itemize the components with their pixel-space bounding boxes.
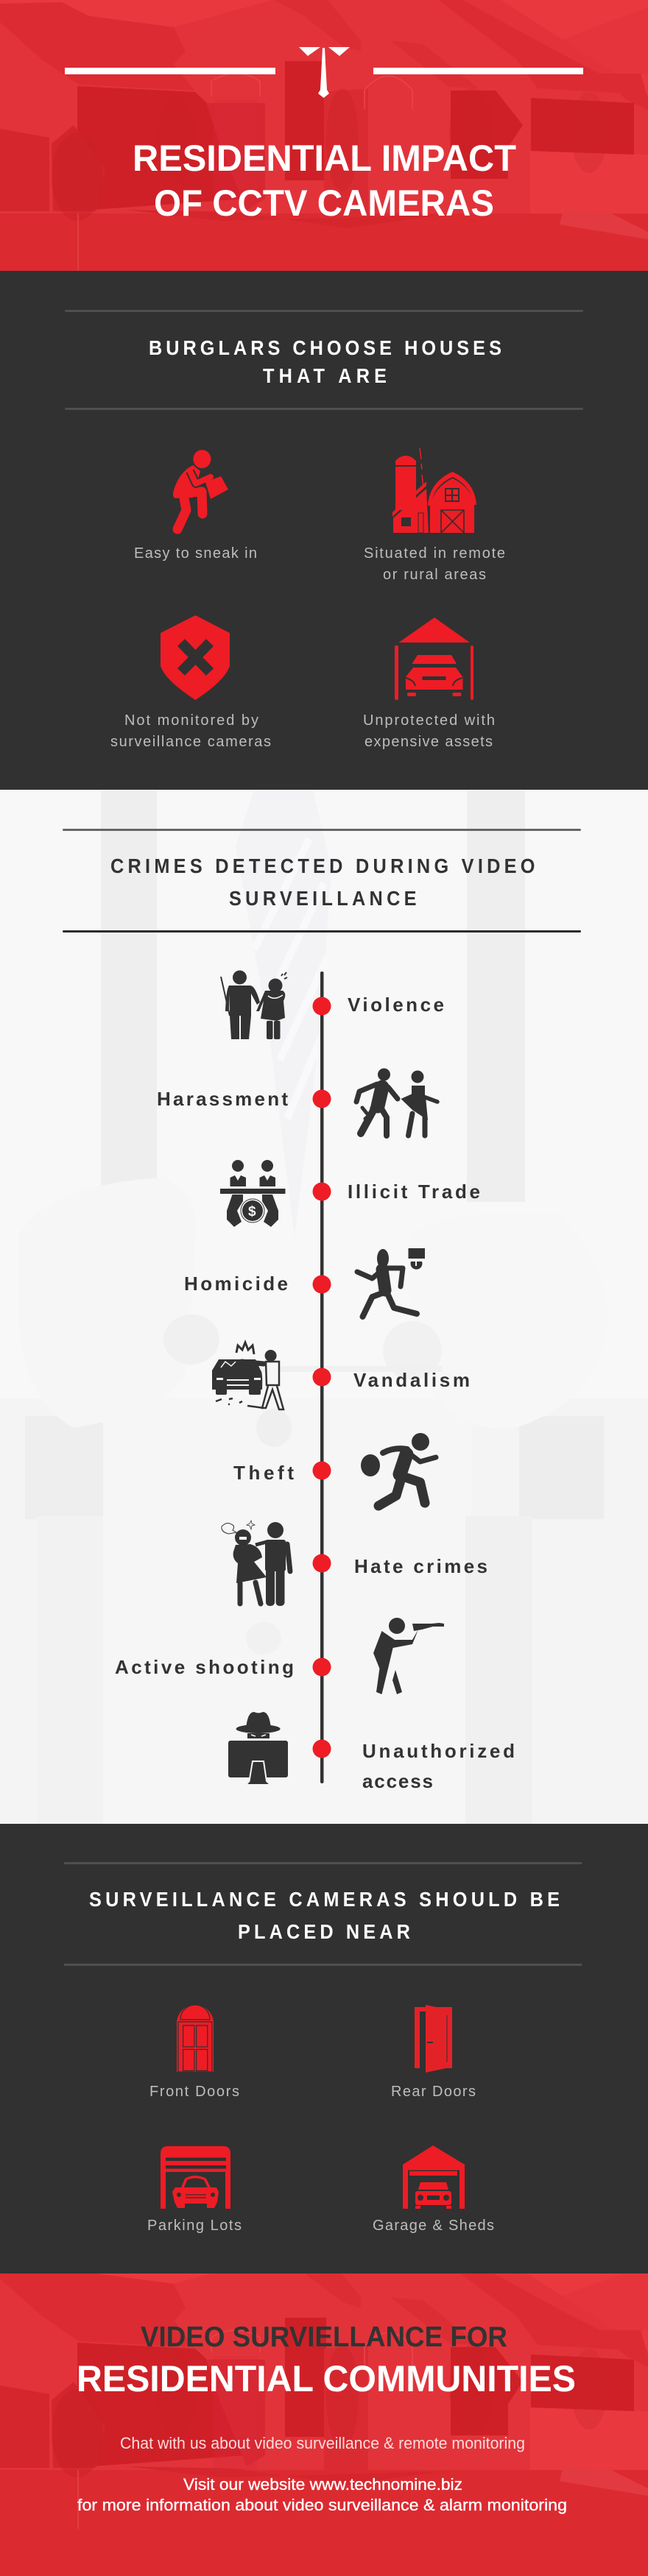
icon: theft xyxy=(361,1433,436,1506)
heading rules xyxy=(63,829,581,933)
icon: hate crime xyxy=(222,1521,290,1606)
label: not monitored: surveillance cameras xyxy=(110,734,271,750)
icon: illicit trade: $ xyxy=(248,1204,256,1220)
heading: burglars choose houses: THAT ARE xyxy=(263,364,387,387)
label: unauthorized access xyxy=(362,1740,515,1792)
icon: vandalism xyxy=(212,1342,284,1409)
icon: front door xyxy=(177,2005,214,2072)
label: front doors: Front Doors xyxy=(149,2084,239,2100)
footer title xyxy=(77,2321,576,2399)
label: not monitored: Not monitored by xyxy=(124,712,258,729)
chat text: Chat with us about video surveillance & remote monitoring xyxy=(120,2434,525,2452)
heading: crimes detected: CRIMES DETECTED DURING VIDEO xyxy=(110,854,535,877)
heading: placed near: PLACED NEAR xyxy=(238,1920,410,1943)
right header bar xyxy=(373,68,583,74)
heading: crimes detected xyxy=(110,854,535,910)
label: unprotected: expensive assets xyxy=(364,734,493,750)
icon: illicit trade xyxy=(220,1160,286,1227)
left header bar xyxy=(65,68,275,74)
title: OF CCTV CAMERAS xyxy=(154,183,494,224)
panel: surveillance cameras should be placed near xyxy=(0,1824,648,2274)
website text: Visit our website www.technomine.biz xyxy=(183,2475,462,2494)
icon: violence xyxy=(221,970,287,1039)
panel: burglars choose houses xyxy=(0,271,648,790)
heading: placed near xyxy=(89,1888,560,1943)
label: theft: Theft xyxy=(233,1462,294,1484)
label: garage and sheds: Garage & Sheds xyxy=(373,2218,494,2234)
label: unprotected xyxy=(363,712,495,750)
timeline markers xyxy=(312,997,331,1758)
icon: hacker at monitor xyxy=(228,1712,288,1785)
title xyxy=(133,138,516,224)
label: vandalism: Vandalism xyxy=(353,1369,470,1391)
icon: active shooter xyxy=(373,1618,444,1694)
title: RESIDENTIAL IMPACT xyxy=(133,138,516,179)
label: remote or rural areas xyxy=(364,545,505,583)
label: harassment: Harassment xyxy=(157,1088,288,1110)
label: parking lots: Parking Lots xyxy=(147,2218,242,2234)
label: unauthorized access: Unauthorized xyxy=(362,1740,515,1762)
label: unauthorized access: access xyxy=(362,1770,433,1792)
background: red tinted house photo xyxy=(0,2274,648,2576)
heading: crimes detected: SURVEILLANCE xyxy=(229,887,417,910)
icon: carport with car xyxy=(395,618,473,700)
icon: parking structure with car xyxy=(161,2146,230,2209)
icon: homicide xyxy=(357,1248,425,1317)
panel: header banner xyxy=(0,0,648,339)
panel: crimes detected during video surveillance xyxy=(0,790,648,1824)
footer title: RESIDENTIAL COMMUNITIES xyxy=(77,2358,576,2399)
icon: remote barn with silo xyxy=(392,448,476,533)
icon: rear door xyxy=(415,2005,452,2073)
icon: white collar and tie xyxy=(299,47,350,98)
heading: burglars choose houses: BURGLARS CHOOSE HOUSES xyxy=(149,336,501,359)
heading: burglars choose houses xyxy=(149,336,501,387)
background: faded suit and handcuffs photo xyxy=(0,790,648,1824)
label: not monitored xyxy=(110,712,271,750)
label: easy to sneak in: Easy to sneak in xyxy=(134,545,257,562)
timeline axis xyxy=(320,972,324,1783)
label: homicide: Homicide xyxy=(184,1273,288,1295)
icon: harassment xyxy=(356,1069,437,1136)
label: unprotected: Unprotected with xyxy=(363,712,495,729)
icon: shield with cross xyxy=(161,615,230,700)
label: hate crimes: Hate crimes xyxy=(354,1555,487,1577)
icon: garage and shed xyxy=(403,2145,465,2209)
icon: burglar sneaking xyxy=(173,450,228,529)
heading: placed near: SURVEILLANCE CAMERAS SHOULD BE xyxy=(89,1888,560,1911)
website text: for more information about video surveillance & alarm monitoring xyxy=(77,2496,567,2514)
label: violence: Violence xyxy=(348,994,444,1016)
label: rear doors: Rear Doors xyxy=(391,2084,476,2100)
label: remote or rural areas: or rural areas xyxy=(383,567,486,583)
background: red tinted house photo xyxy=(0,0,648,271)
website text xyxy=(77,2475,567,2514)
label: illicit trade: Illicit Trade xyxy=(348,1181,480,1203)
footer title: VIDEO SURVIELLANCE FOR xyxy=(141,2321,507,2353)
label: remote or rural areas: Situated in remote xyxy=(364,545,505,562)
label: active shooting: Active shooting xyxy=(115,1656,294,1678)
panel: footer call to action xyxy=(0,2257,648,2576)
